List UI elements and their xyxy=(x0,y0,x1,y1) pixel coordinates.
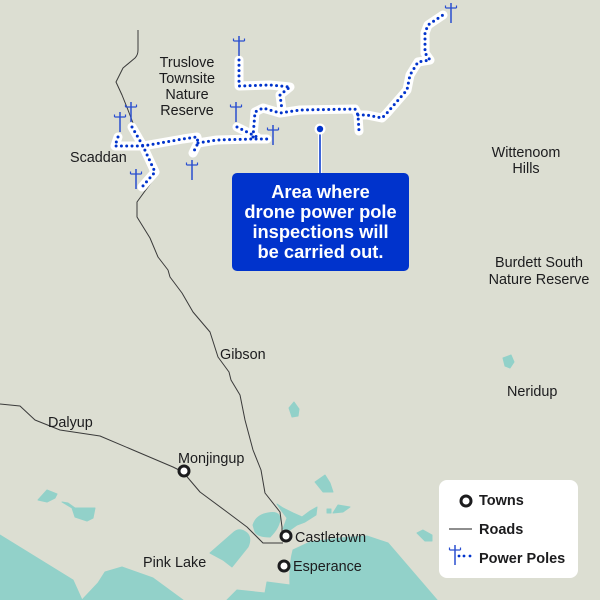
place labels: Nature Reserve xyxy=(489,272,589,288)
town markers xyxy=(179,466,291,571)
place labels xyxy=(48,55,589,575)
place labels: Wittenoom xyxy=(492,145,560,161)
place labels: Townsite xyxy=(159,71,215,87)
place labels: Esperance xyxy=(293,559,362,575)
place labels: Monjingup xyxy=(178,451,244,467)
place labels: Castletown xyxy=(295,530,366,546)
legend: towns: Towns xyxy=(479,493,524,509)
callout box xyxy=(232,173,409,271)
route dots xyxy=(115,15,443,187)
place labels: Gibson xyxy=(220,347,266,363)
place labels: Pink Lake xyxy=(143,555,206,571)
place labels: Burdett South xyxy=(495,255,583,271)
place labels: Hills xyxy=(512,161,540,177)
power line route xyxy=(115,15,443,187)
legend: roads: Roads xyxy=(479,522,523,538)
place labels: Scaddan xyxy=(70,150,127,166)
callout box: Area where xyxy=(271,181,370,202)
legend xyxy=(439,480,578,578)
place labels: Nature xyxy=(165,87,209,103)
legend: power poles: Power Poles xyxy=(479,551,565,567)
place labels: Neridup xyxy=(507,384,557,400)
place labels: Reserve xyxy=(160,103,214,119)
route casing xyxy=(115,15,443,187)
callout box: be carried out. xyxy=(258,241,383,262)
power pole icons xyxy=(114,3,456,189)
callout box: drone power pole xyxy=(244,201,397,222)
place labels: Truslove xyxy=(160,55,214,71)
place labels: Dalyup xyxy=(48,415,93,431)
water bodies xyxy=(0,355,514,600)
callout box: inspections will xyxy=(252,221,389,242)
callout marker and leader xyxy=(314,124,326,175)
roads xyxy=(0,30,283,543)
